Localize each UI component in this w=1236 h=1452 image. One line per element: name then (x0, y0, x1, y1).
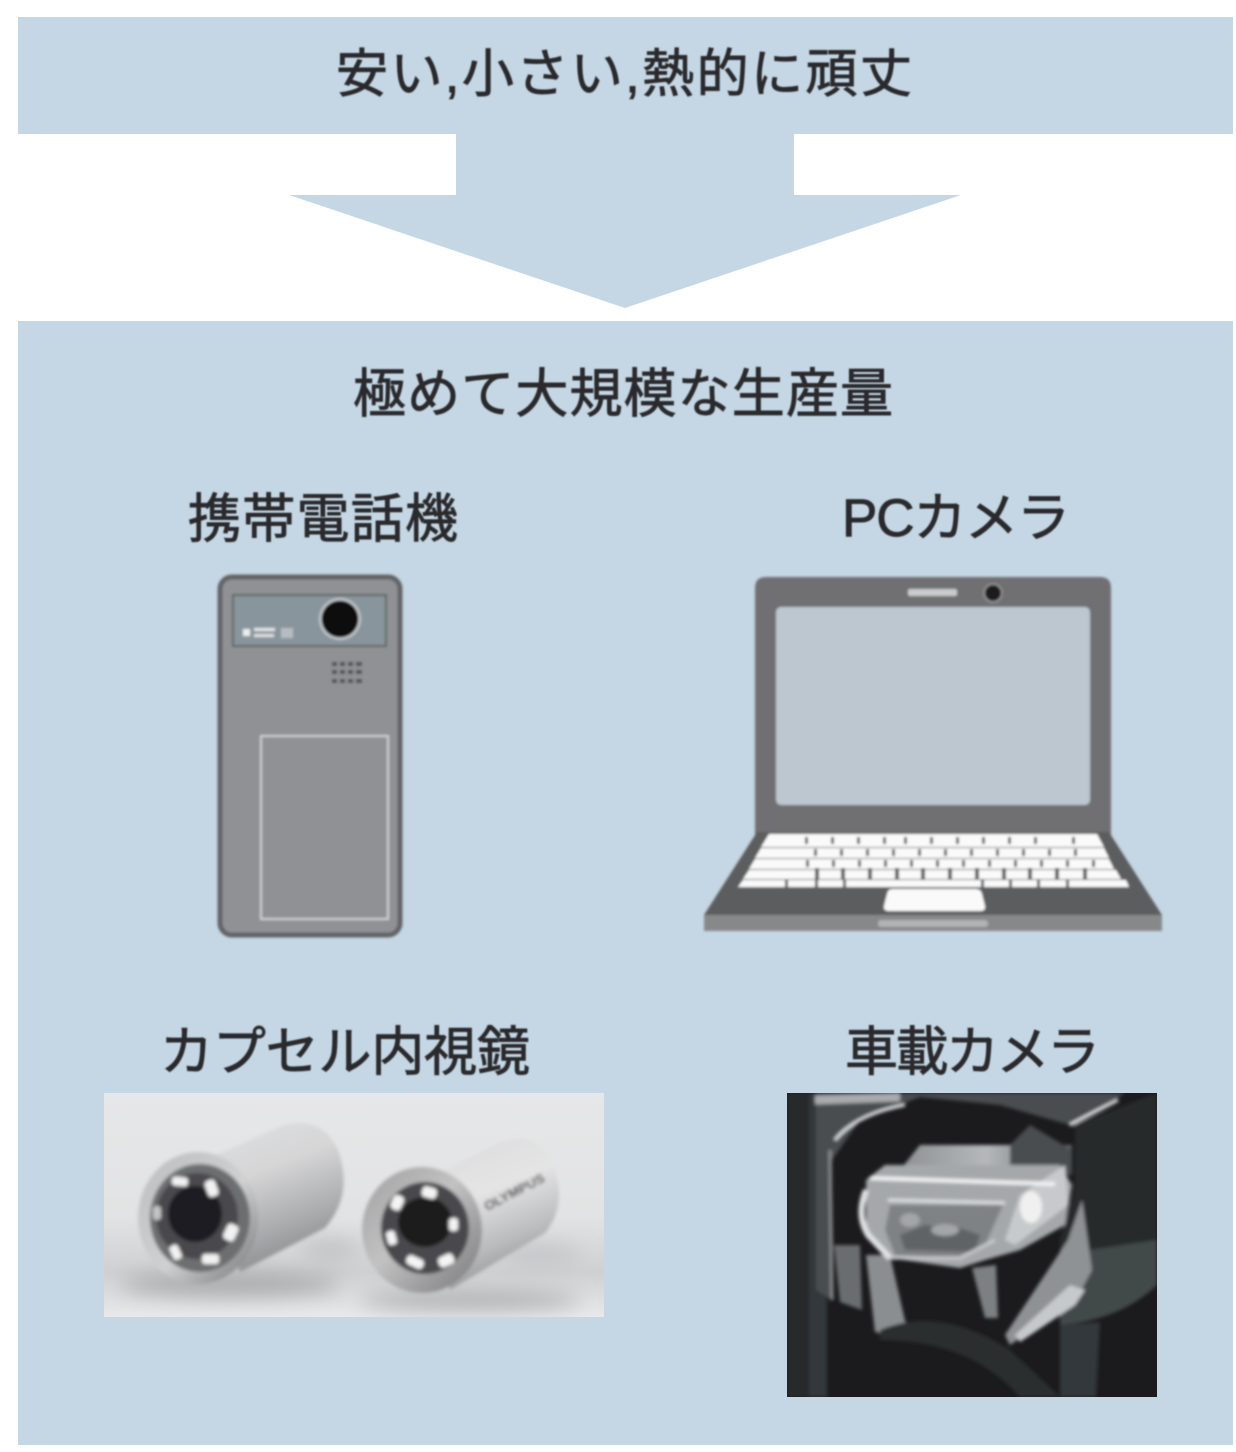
photo: in-vehicle camera (787, 1093, 1157, 1397)
laptop trackpad (884, 889, 985, 911)
left capsule (205, 1123, 344, 1272)
top banner: 安い,小さい,熱的に頑丈 (18, 17, 1233, 134)
icon: laptop (704, 577, 1162, 931)
label: PC camera: PCカメラ (842, 489, 1070, 548)
arrow pointing down (289, 134, 961, 308)
panel heading: 極めて大規模な生産量 (353, 365, 893, 424)
label: in-vehicle camera: 車載カメラ (845, 1023, 1100, 1082)
panel: mass production (18, 321, 1233, 1445)
banner heading: 安い,小さい,熱的に頑丈 (336, 46, 912, 104)
capsule brand mark: OLYMPUS (482, 1170, 547, 1214)
right capsule (425, 1139, 559, 1290)
icon: mobile phone (220, 577, 400, 935)
laptop keyboard (738, 834, 1129, 887)
label: mobile phone: 携帯電話機 (188, 490, 458, 549)
photo: capsule endoscopes (104, 1093, 604, 1317)
label: capsule endoscope: カプセル内視鏡 (160, 1023, 530, 1082)
